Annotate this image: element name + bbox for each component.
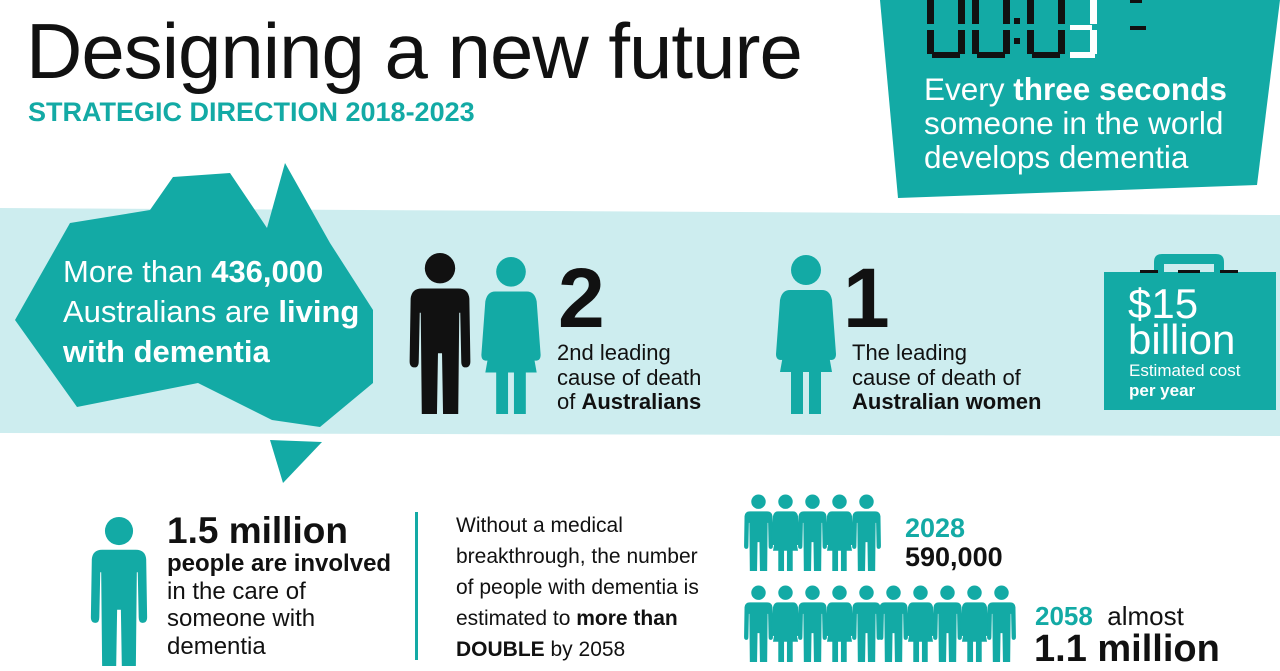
number 2: 2 (558, 251, 605, 345)
text: Australian women (852, 389, 1041, 414)
panel: carers: dementia (167, 632, 266, 660)
text: every three seconds: Every three seconds (924, 71, 1227, 107)
text: 436,000: More than 436,000 (63, 254, 323, 289)
chart: 2028 people (744, 494, 1003, 572)
text: 436,000: with dementia (63, 334, 270, 369)
text (557, 340, 701, 414)
panel: suitcase cost: per year (1129, 381, 1195, 400)
icon: woman (776, 255, 836, 414)
text: 2nd leading (557, 340, 671, 365)
panel: carers: in the care of (167, 578, 306, 604)
text: medical breakthrough: estimated to more than (456, 607, 678, 630)
label 2028: 590,000 (905, 542, 1003, 572)
text: of Australians (557, 389, 701, 414)
text: 1.5 million: 1.5 million (167, 510, 348, 551)
icon: person (90, 517, 148, 666)
panel: carers: people are involved (167, 550, 391, 577)
label 2028 (905, 513, 1003, 572)
subtitle: STRATEGIC DIRECTION 2018-2023 (28, 97, 475, 127)
text: cause of death of (852, 364, 1021, 390)
divider (415, 512, 418, 660)
text: $15 billion: $15 (1128, 280, 1198, 327)
text: $15 billion: billion (1128, 316, 1235, 363)
panel: suitcase cost (1104, 254, 1276, 410)
text: every three seconds: someone in the world (924, 105, 1223, 141)
panel: carers (90, 510, 391, 666)
panel: carers: someone with (167, 605, 315, 632)
chart: 2058 people: 1.1 million (1034, 628, 1220, 670)
panel: leading cause women (776, 251, 1041, 414)
text: cause of death (557, 364, 701, 390)
icon: man and woman (410, 253, 541, 414)
panel: 2nd leading cause (410, 251, 701, 414)
label 2028: 2028 (905, 513, 965, 543)
clock digits (927, 0, 1146, 58)
text: $15 billion (1128, 280, 1235, 363)
text: 436,000: Australians are living (63, 294, 359, 329)
label 2058: 2058 almost (1035, 601, 1184, 631)
text: medical breakthrough: breakthrough, the number (456, 545, 698, 568)
number 1: 1 (843, 251, 890, 345)
panel: Australia map (15, 163, 373, 483)
title: Designing a new future (26, 7, 802, 95)
text: medical breakthrough: DOUBLE by 2058 (456, 638, 625, 661)
text: medical breakthrough: of people with dementia is (456, 576, 699, 599)
chart: 2058 people (744, 586, 1220, 670)
text (852, 340, 1041, 414)
text: medical breakthrough (456, 514, 699, 661)
text: every three seconds (924, 71, 1227, 175)
text: 436,000 (62, 254, 359, 369)
text: every three seconds: develops dementia (924, 139, 1188, 175)
panel: three seconds (880, 0, 1280, 198)
panel: suitcase cost: Estimated cost (1129, 361, 1240, 380)
text: The leading (852, 340, 967, 365)
text: medical breakthrough: Without a medical (456, 514, 623, 537)
